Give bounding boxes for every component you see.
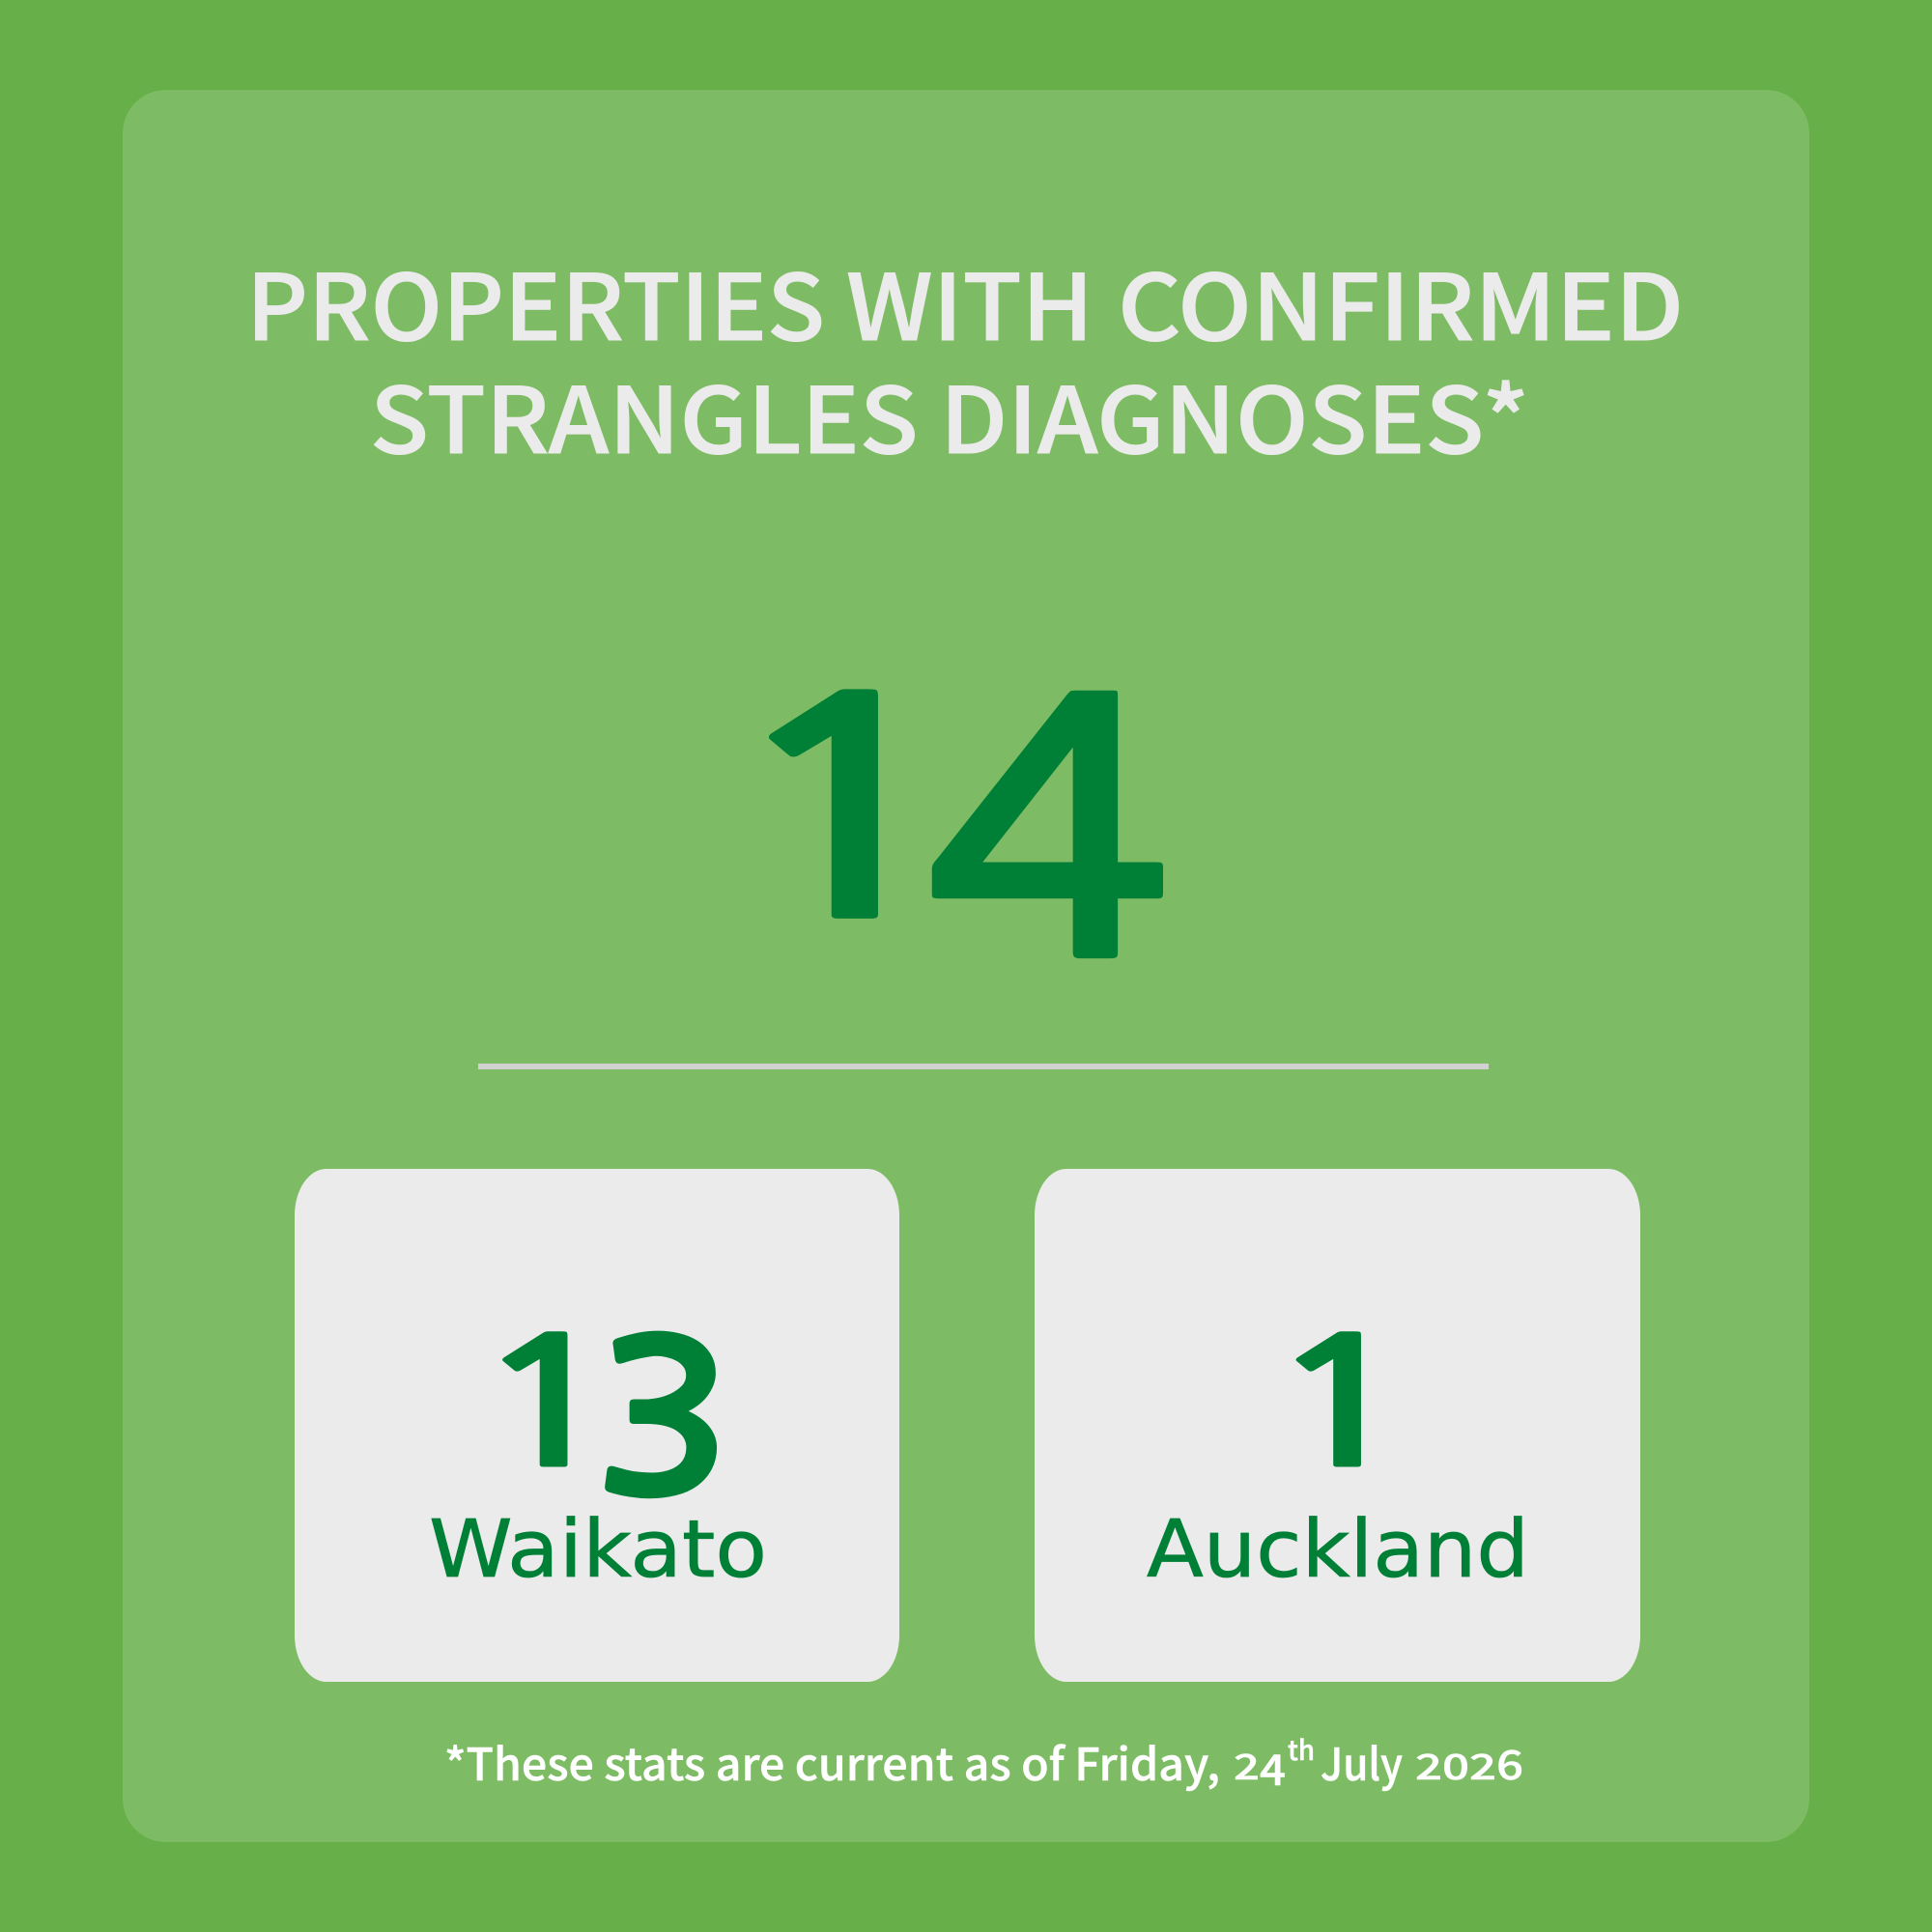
total count: 14 (713, 661, 1175, 1010)
divider line (478, 1064, 1489, 1069)
heading: CONFIRMED (1118, 236, 1684, 367)
footnote (444, 1730, 1523, 1798)
heading: WITH (846, 236, 1094, 367)
Waikato count: 13: 1 (469, 1318, 627, 1493)
footnote: *These stats are current as of Friday, (444, 1730, 1220, 1794)
footnote: 202 (1415, 1740, 1496, 1790)
footnote: 4 (1260, 1736, 1286, 1798)
footnote: th (1288, 1730, 1315, 1769)
card: Auckland (1035, 1169, 1640, 1682)
footnote: 6 (1496, 1733, 1523, 1792)
footnote: July (1321, 1730, 1403, 1794)
Waikato count: 13 (469, 1318, 734, 1526)
Auckland count: 1: 1 (1263, 1318, 1420, 1493)
heading: PROPERTIES (246, 236, 825, 367)
total count: 14: 4 (921, 661, 1175, 1010)
Waikato label: Waikato (429, 1504, 767, 1596)
Waikato count: 13: 3 (593, 1318, 734, 1526)
total count: 14: 1 (713, 664, 977, 963)
Auckland label: Auckland (1147, 1504, 1529, 1596)
card: Waikato (295, 1169, 899, 1682)
heading (246, 236, 1684, 480)
heading: STRANGLES DIAGNOSES* (370, 349, 1529, 480)
footnote: 2 (1234, 1740, 1260, 1790)
panel: main statistics (123, 90, 1809, 1842)
